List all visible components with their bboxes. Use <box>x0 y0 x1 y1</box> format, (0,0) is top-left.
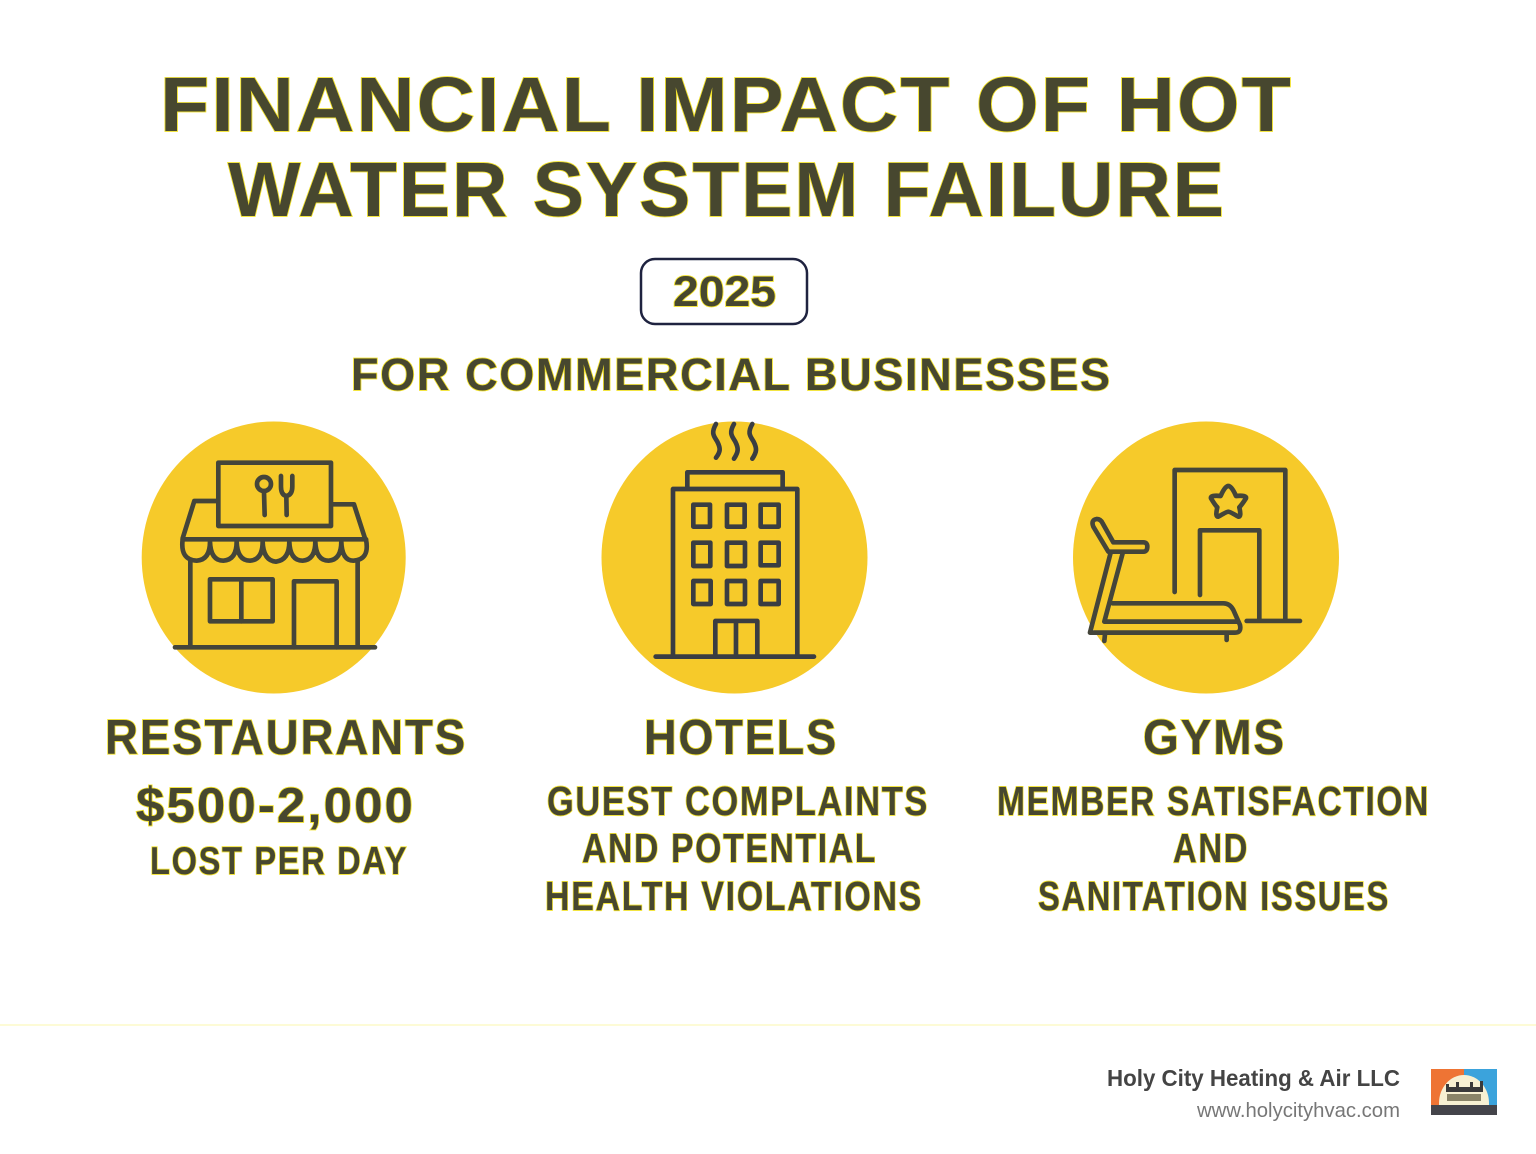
icon: hotel building with steam <box>602 422 868 694</box>
text: hotel impacts: AND POTENTIAL <box>582 825 877 871</box>
title <box>160 62 1293 233</box>
title: WATER SYSTEM FAILURE <box>228 147 1226 233</box>
text: hotel impacts: GUEST COMPLAINTS <box>547 778 929 824</box>
footer website: www.holycityhvac.com <box>1196 1099 1400 1122</box>
heading: hotels: HOTELS <box>644 711 838 765</box>
stat: daily loss: $500-2,000 <box>136 779 415 833</box>
text: lost per day: LOST PER DAY <box>150 840 408 883</box>
year badge <box>641 259 807 324</box>
heading: restaurants: RESTAURANTS <box>105 711 467 765</box>
panel: restaurants <box>105 422 467 883</box>
text: gym impacts: SANITATION ISSUES <box>1038 873 1390 919</box>
panel: hotels <box>545 422 929 919</box>
text: gym impacts <box>997 778 1430 919</box>
text: gym impacts: AND <box>1173 825 1249 871</box>
icon: treadmill and gym door <box>1073 422 1339 694</box>
text: hotel impacts <box>545 778 929 919</box>
icon: restaurant storefront <box>142 422 406 694</box>
year badge: 2025 <box>673 268 776 316</box>
heading: gyms: GYMS <box>1143 711 1286 765</box>
icon: company logo <box>1431 1069 1497 1115</box>
text: gym impacts: MEMBER SATISFACTION <box>997 778 1430 824</box>
panel: gyms <box>997 422 1430 919</box>
subtitle: FOR COMMERCIAL BUSINESSES <box>351 349 1110 400</box>
text: hotel impacts: HEALTH VIOLATIONS <box>545 873 923 919</box>
footer company name: Holy City Heating & Air LLC <box>1107 1065 1400 1091</box>
title: FINANCIAL IMPACT OF HOT <box>160 62 1293 148</box>
